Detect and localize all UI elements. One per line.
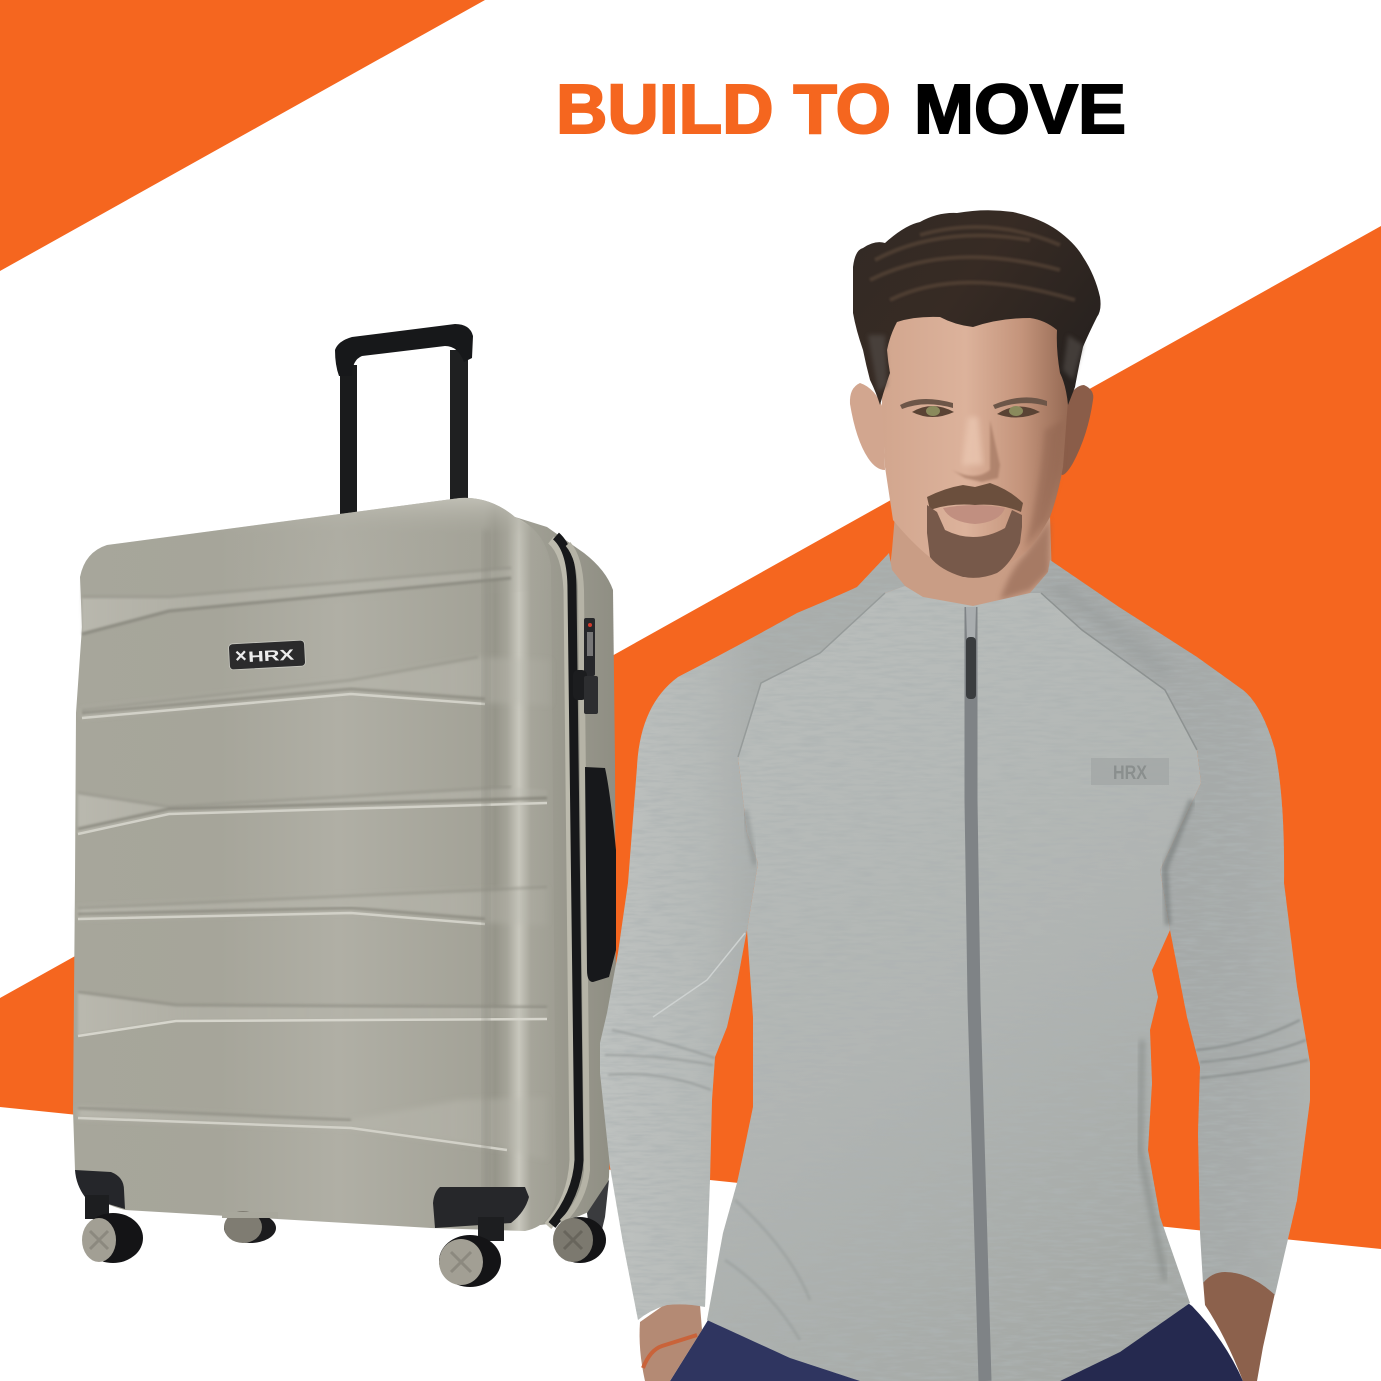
- orange triangle top left: [0, 0, 485, 271]
- left eyebrow: [900, 399, 953, 409]
- orange diagonal band: [0, 226, 1381, 1249]
- jacket seams and folds: [605, 585, 1308, 1340]
- side carry handle: [585, 767, 616, 982]
- shell ribs: [78, 568, 551, 1160]
- right sleeve: [1030, 560, 1310, 1295]
- nose highlight: [962, 417, 983, 465]
- zipper pull: [966, 607, 976, 699]
- chest logo: HRX: [1113, 763, 1147, 784]
- left sleeve: [600, 553, 905, 1320]
- HRX logo badge: [228, 640, 306, 670]
- title: BUILD TO: BUILD TO: [556, 70, 891, 148]
- rib 2: [82, 657, 551, 718]
- raglan seam left: [738, 593, 885, 757]
- title: [556, 70, 1126, 148]
- side panel seam right: [1140, 1040, 1165, 1280]
- zipper: [971, 607, 985, 1381]
- shoulder shade right: [1055, 585, 1170, 675]
- hair temple grey: [868, 335, 1083, 392]
- cheek shade: [1025, 420, 1064, 548]
- neck shadow: [1000, 520, 1050, 600]
- raglan seam right: [1041, 593, 1197, 750]
- rib 4: [78, 887, 547, 925]
- aluminium rail: [548, 540, 574, 1226]
- badge wordmark: HRX: [248, 647, 294, 666]
- left ear: [850, 383, 885, 470]
- right eyebrow: [993, 397, 1047, 409]
- badge mark: ×: [234, 645, 247, 668]
- jacket torso: [707, 586, 1201, 1381]
- title: MOVE: MOVE: [914, 70, 1126, 148]
- rib 6: [78, 1097, 547, 1160]
- elbow folds right: [1196, 1020, 1308, 1078]
- rear middle wheel: [222, 1211, 278, 1243]
- face: [880, 300, 1068, 578]
- man in grey jacket: [600, 210, 1310, 1381]
- right hand: [1203, 1270, 1275, 1381]
- top edge highlight: [78, 498, 551, 620]
- goatee and moustache: [927, 483, 1023, 578]
- chest logo: [1091, 758, 1169, 785]
- right eye socket and eye: [997, 406, 1040, 418]
- elbow folds left: [605, 1030, 715, 1090]
- zipper seam: [552, 536, 579, 1225]
- hair strands: [870, 227, 1075, 300]
- outer rail: [562, 544, 587, 1222]
- side panel: [515, 517, 616, 1225]
- armpit shade left: [745, 810, 755, 865]
- rib 1: [82, 568, 511, 634]
- hem folds left: [725, 1200, 810, 1340]
- goatee: [927, 505, 1022, 578]
- navy trousers: [670, 1290, 1243, 1381]
- moustache: [927, 483, 1023, 512]
- hair: [853, 210, 1101, 405]
- trousers right: [1040, 1290, 1243, 1381]
- front right wheel: [433, 1187, 529, 1287]
- front left wheel: [75, 1170, 143, 1263]
- left hand: [640, 1303, 702, 1381]
- trousers left: [670, 1300, 880, 1381]
- armpit shade right: [1165, 800, 1192, 925]
- rib 3: [78, 787, 547, 834]
- nose shadow: [952, 420, 1000, 482]
- suitcase: [73, 324, 616, 1287]
- vertical corner shade: [482, 530, 490, 1200]
- elbow seam left: [653, 933, 745, 1017]
- right ear: [1059, 385, 1093, 475]
- rear right wheel: [553, 1180, 609, 1263]
- rib 5: [78, 992, 547, 1036]
- lips: [943, 505, 1005, 524]
- wrist bracelet: [643, 1335, 697, 1368]
- telescopic handle: [335, 324, 473, 515]
- combination lock: [573, 618, 598, 714]
- front shell: [73, 498, 556, 1231]
- left eye socket and eye: [912, 406, 954, 417]
- neck: [888, 515, 1052, 612]
